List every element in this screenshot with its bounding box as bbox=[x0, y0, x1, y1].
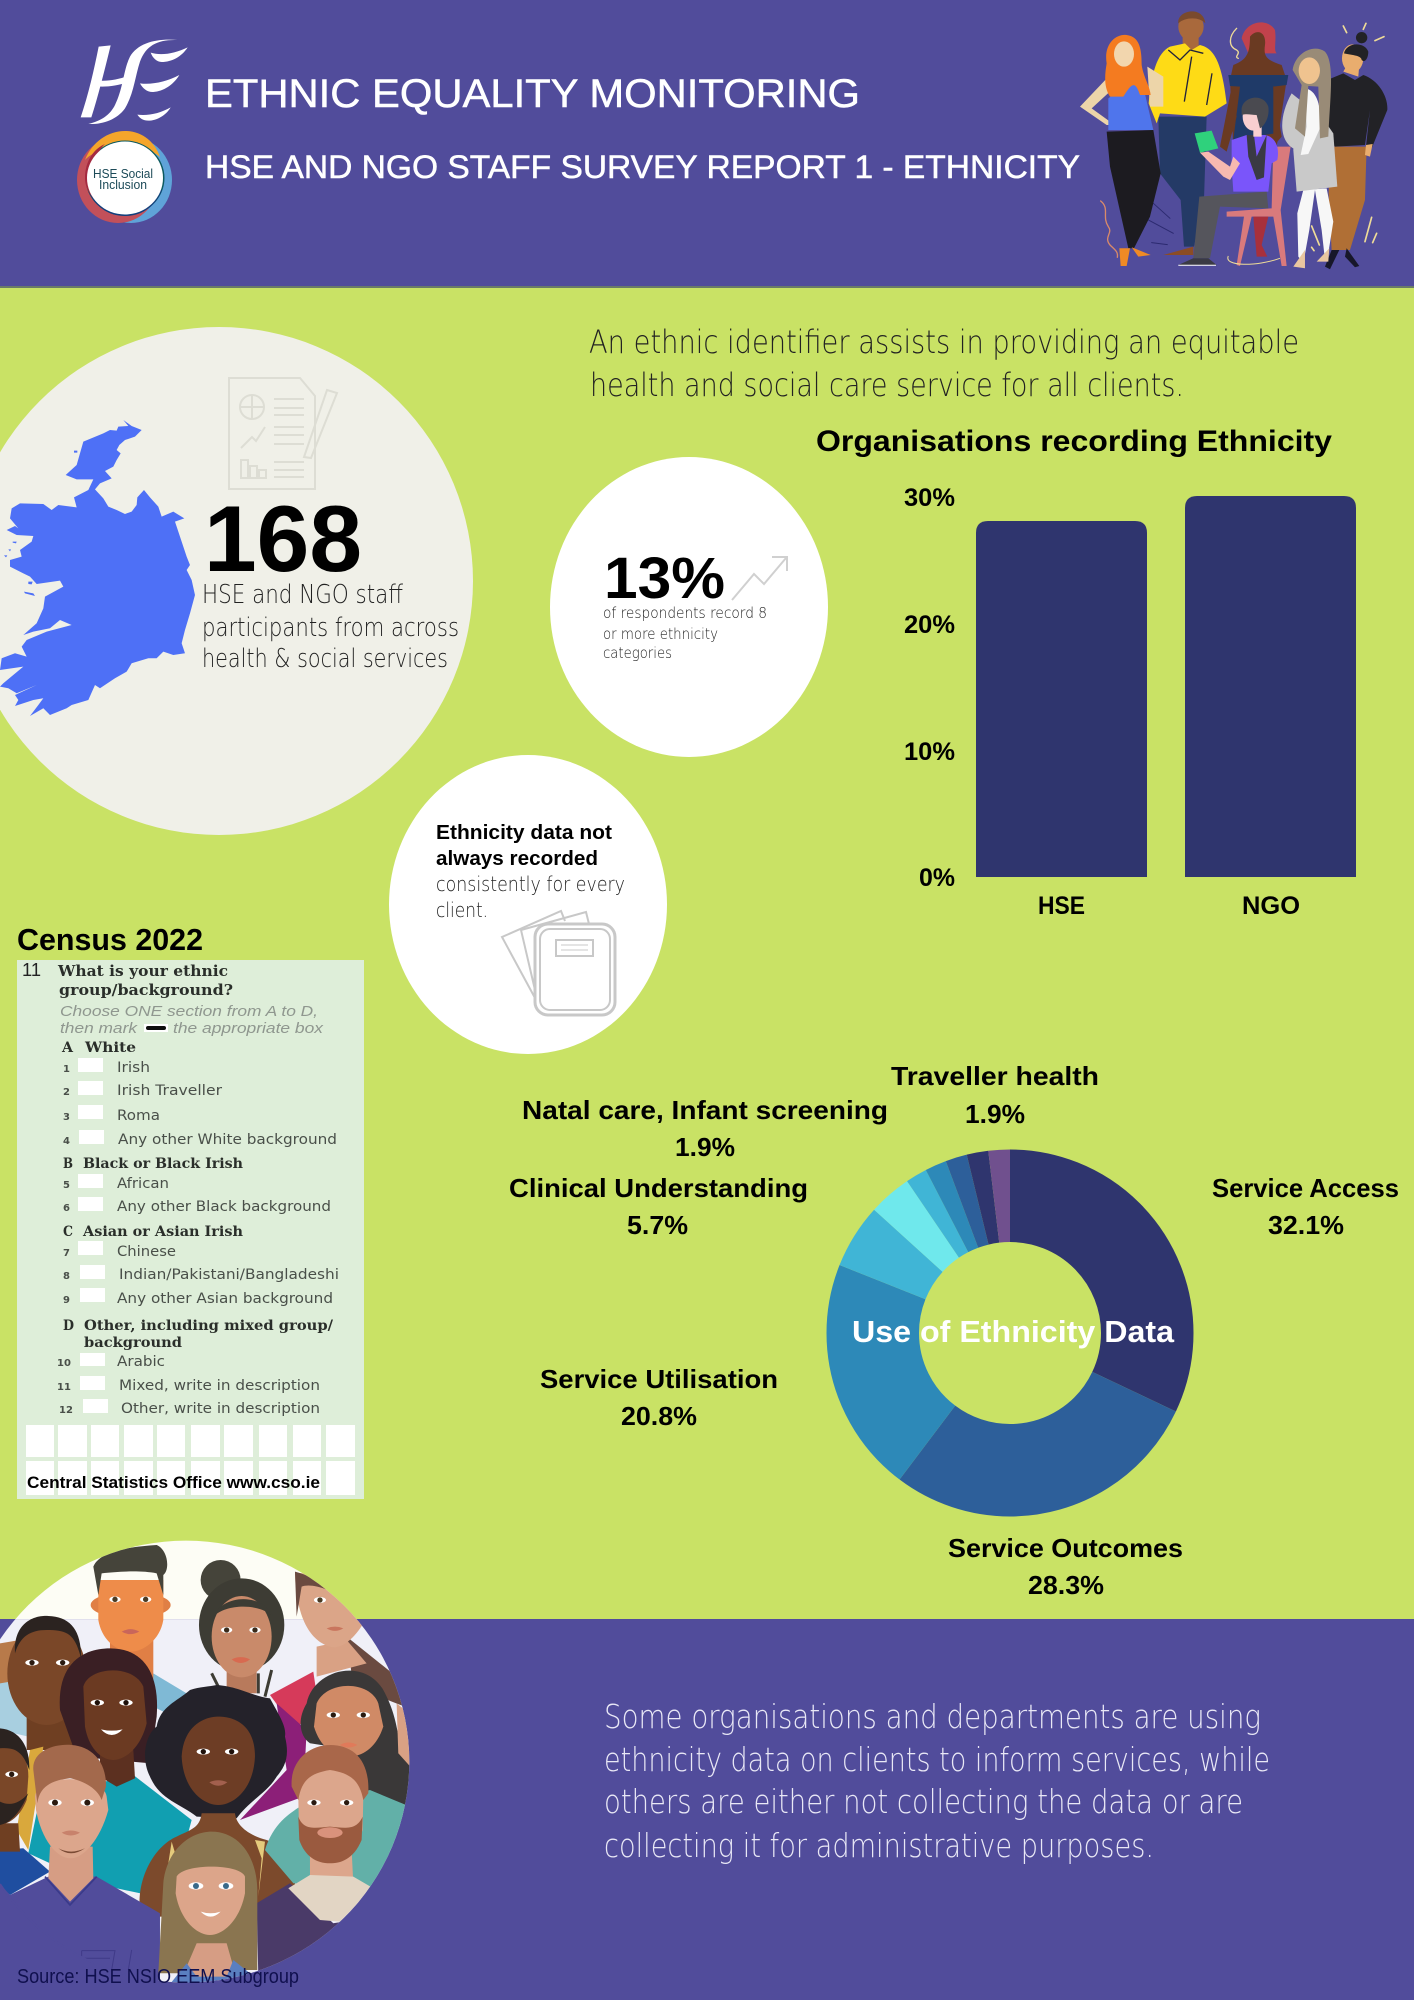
text: participants description: health & social services bbox=[202, 644, 448, 674]
text: consistency statement bbox=[436, 872, 625, 922]
logo text: HSE Social bbox=[93, 166, 153, 181]
bar: NGO bbox=[1185, 496, 1356, 877]
section A: Irish bbox=[117, 1060, 150, 1076]
person: afro background magenta top bbox=[240, 1703, 307, 1820]
text: 13% description bbox=[603, 604, 767, 662]
section C: Chinese bbox=[117, 1244, 176, 1260]
section C: Any other Asian background bbox=[117, 1291, 333, 1307]
section C: Indian/Pakistani/Bangladeshi bbox=[119, 1267, 339, 1283]
section A: 2 bbox=[63, 1087, 70, 1098]
section A: Irish Traveller bbox=[117, 1083, 222, 1099]
section A: A bbox=[61, 1040, 74, 1056]
donut centre title: Use of Ethnicity Data bbox=[852, 1314, 1175, 1349]
text: ethnic identifier statement: An ethnic identifier assists in providing an equitable bbox=[589, 323, 1299, 361]
faint mark on shirt bbox=[82, 1950, 132, 1970]
section A bbox=[61, 1040, 337, 1148]
section B: Any other Black background bbox=[117, 1199, 331, 1215]
question text: group/background? bbox=[59, 981, 233, 999]
label: Traveller health bbox=[891, 1061, 1099, 1129]
section B: B bbox=[63, 1156, 73, 1172]
text: bold statement bbox=[436, 822, 612, 870]
text: closing statement: ethnicity data on clients to inform services, while bbox=[604, 1740, 1270, 1779]
instruction text: then mark bbox=[60, 1020, 139, 1037]
instruction text bbox=[60, 1003, 324, 1037]
figure: woman with orange hair bbox=[1080, 35, 1163, 266]
label: Service Access bbox=[1212, 1173, 1399, 1240]
section D: 12 bbox=[59, 1405, 73, 1416]
stat: 168: 168 bbox=[204, 486, 362, 591]
label: Traveller health: Traveller health bbox=[891, 1061, 1099, 1091]
header band bbox=[0, 0, 1414, 288]
text: participants description: participants from across bbox=[202, 613, 459, 643]
icon: HSE logo bbox=[81, 40, 188, 124]
icon: document and pencil bbox=[229, 378, 337, 489]
person: top man bbox=[91, 1545, 187, 1717]
person: teal shirt woman bbox=[28, 1648, 192, 1893]
section A: Any other White background bbox=[118, 1132, 337, 1148]
subtitle: HSE AND NGO STAFF SURVEY REPORT 1 - ETHNICITY bbox=[205, 149, 1080, 185]
label: Natal care: 1.9% bbox=[675, 1132, 735, 1162]
section B: 5 bbox=[63, 1180, 70, 1191]
label: Service Outcomes: 28.3% bbox=[1028, 1570, 1104, 1600]
text: consistency statement: consistently for every bbox=[436, 872, 625, 896]
person: front left man bbox=[0, 1745, 160, 1997]
icon: trend arrow bbox=[732, 557, 787, 600]
figure: woman in hijab bbox=[1282, 49, 1337, 268]
title: ETHNIC EQUALITY MONITORING bbox=[205, 72, 860, 116]
label: Clinical Understanding bbox=[509, 1173, 808, 1240]
label: Service Outcomes: Service Outcomes bbox=[948, 1533, 1183, 1563]
bar chart: organisations recording ethnicity bbox=[904, 484, 1356, 920]
figure: dark woman at back bbox=[1220, 22, 1288, 152]
text: bold statement: Ethnicity data not bbox=[436, 822, 612, 844]
person: long haired woman right bbox=[301, 1671, 413, 1807]
text: closing statement: Some organisations and departments are using bbox=[604, 1697, 1261, 1736]
decorative squiggles bbox=[1101, 23, 1384, 257]
section C: Asian or Asian Irish bbox=[82, 1224, 243, 1240]
panel: 168 participants circle bbox=[0, 327, 473, 835]
section C: 9 bbox=[63, 1295, 70, 1306]
panel: census form question bbox=[17, 960, 364, 1499]
text: bold statement: always recorded bbox=[436, 848, 598, 870]
label: Clinical Understanding: Clinical Understanding bbox=[509, 1173, 808, 1203]
section D: Other, including mixed group/ bbox=[84, 1318, 334, 1334]
section B: 6 bbox=[63, 1203, 70, 1214]
heading: Census 2022: Census 2022 bbox=[17, 922, 203, 957]
person: bearded man bbox=[257, 1745, 410, 1980]
section D: Other, write in description bbox=[121, 1401, 320, 1417]
illustration: circle of diverse faces bbox=[0, 1530, 427, 1999]
section B: Black or Black Irish bbox=[83, 1156, 243, 1172]
figure: seated person with book bbox=[1178, 98, 1291, 266]
text: closing statement: collecting it for administrative purposes. bbox=[604, 1826, 1154, 1865]
panel: ethnicity data not always recorded circle bbox=[389, 755, 667, 1054]
section A: 4 bbox=[63, 1136, 70, 1147]
label: Service Utilisation: Service Utilisation bbox=[540, 1364, 778, 1394]
section C: C bbox=[63, 1224, 73, 1240]
section D: Arabic bbox=[117, 1354, 165, 1370]
stat: 13%: 13% bbox=[604, 546, 725, 611]
question number: 11 bbox=[22, 960, 41, 980]
question text bbox=[57, 962, 233, 999]
logo text line 2: Inclusion bbox=[99, 177, 147, 192]
person: far left bearded man bbox=[0, 1728, 50, 1895]
label: Traveller health: 1.9% bbox=[965, 1099, 1025, 1129]
section B bbox=[63, 1156, 331, 1215]
text: census source: Central Statistics Office www.cso.ie bbox=[27, 1473, 320, 1492]
section A: White bbox=[84, 1040, 136, 1056]
label: Clinical Understanding: 5.7% bbox=[627, 1210, 688, 1240]
text: ethnic identifier statement bbox=[589, 323, 1299, 404]
write-in boxes bbox=[26, 1425, 355, 1495]
bar: HSE bbox=[976, 521, 1147, 877]
bottom band bbox=[0, 1619, 1414, 2000]
source note: Source: HSE NSIO EEM Subgroup bbox=[17, 1966, 299, 1988]
section C bbox=[63, 1224, 339, 1307]
figure: man in yellow shirt bbox=[1149, 11, 1227, 255]
label: Service Access: 32.1% bbox=[1268, 1210, 1344, 1240]
label: Natal care bbox=[522, 1095, 888, 1162]
icon: map of Ireland bbox=[0, 420, 195, 716]
section D: background bbox=[84, 1335, 182, 1351]
x label: HSE: HSE bbox=[1038, 892, 1085, 920]
shirt edge blend over circle rim bbox=[0, 1884, 158, 1981]
section D: 11 bbox=[57, 1382, 71, 1393]
text: closing statement: others are either not collecting the data or are bbox=[604, 1782, 1243, 1821]
text: participants description: HSE and NGO staff bbox=[202, 580, 403, 610]
label: Service Utilisation bbox=[540, 1364, 778, 1431]
person: left dark man bbox=[0, 1616, 86, 1750]
y axis labels: 10% bbox=[904, 738, 955, 766]
label: Service Outcomes bbox=[948, 1533, 1183, 1600]
text: closing statement bbox=[604, 1697, 1270, 1865]
section C: 8 bbox=[63, 1271, 70, 1282]
person: top right woman bbox=[270, 1572, 413, 1727]
text: 13% description: or more ethnicity bbox=[603, 625, 718, 643]
y axis labels bbox=[904, 484, 955, 892]
question text: What is your ethnic bbox=[57, 962, 228, 980]
label: Natal care: Natal care, Infant screening bbox=[522, 1095, 888, 1125]
section A: Roma bbox=[117, 1108, 160, 1124]
text: 13% description: categories bbox=[603, 644, 672, 662]
section D: Mixed, write in description bbox=[119, 1378, 320, 1394]
text: ethnic identifier statement: health and social care service for all clients. bbox=[590, 366, 1184, 404]
label: Service Access: Service Access bbox=[1212, 1173, 1399, 1203]
instruction text: the appropriate box bbox=[173, 1020, 324, 1037]
text: consistency statement: client. bbox=[436, 898, 488, 922]
y axis labels: 20% bbox=[904, 611, 955, 639]
y axis labels: 0% bbox=[919, 864, 955, 892]
illustration: group of diverse people bbox=[1080, 11, 1387, 269]
section D: 10 bbox=[57, 1358, 71, 1369]
x label: NGO: NGO bbox=[1242, 892, 1300, 920]
text: 13% description: of respondents record 8 bbox=[603, 604, 767, 622]
person: afro woman bbox=[140, 1685, 297, 1917]
section C: 7 bbox=[63, 1248, 70, 1259]
figure: man in black top bbox=[1323, 32, 1387, 269]
panel: 13% circle bbox=[550, 457, 828, 757]
section B: African bbox=[117, 1176, 169, 1192]
text: participants description bbox=[202, 580, 459, 674]
label: Service Utilisation: 20.8% bbox=[621, 1401, 697, 1431]
donut chart: use of ethnicity data bbox=[509, 1061, 1399, 1600]
person: blonde woman bbox=[158, 1832, 258, 1983]
section A: 1 bbox=[63, 1064, 70, 1075]
person: woman with hair bun bbox=[199, 1560, 284, 1697]
icon: notebook and papers bbox=[502, 911, 615, 1015]
chart title: Organisations recording Ethnicity bbox=[816, 425, 1332, 458]
y axis labels: 30% bbox=[904, 484, 955, 512]
section A: 3 bbox=[63, 1112, 70, 1123]
instruction text: Choose ONE section from A to D, bbox=[60, 1003, 318, 1020]
section D bbox=[57, 1318, 334, 1417]
section D: D bbox=[63, 1318, 74, 1334]
icon: HSE Social Inclusion logo bbox=[77, 131, 172, 223]
